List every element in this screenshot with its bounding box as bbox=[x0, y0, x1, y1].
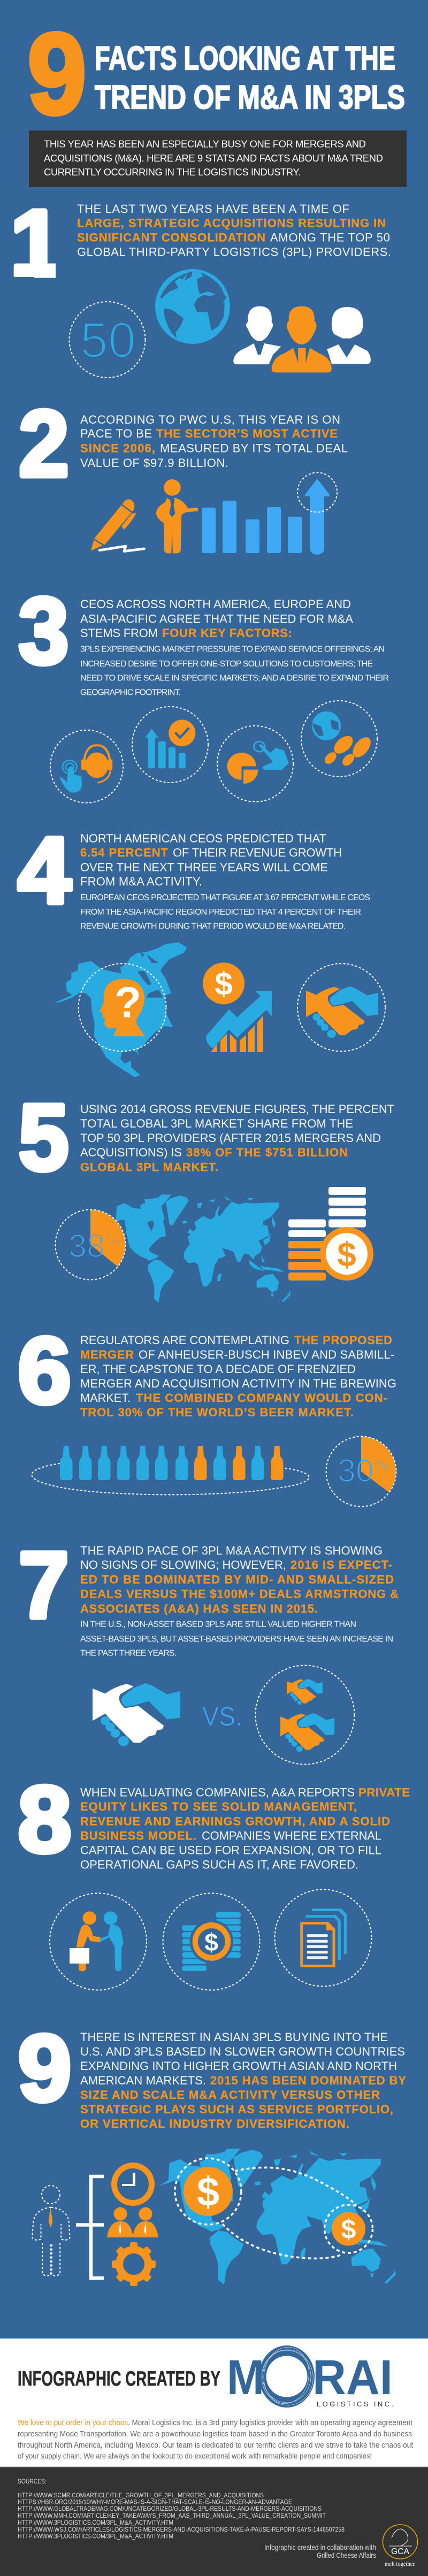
icon: business deal bbox=[50, 1893, 147, 1990]
fact 5 text: 38% OF THE $751 BILLION bbox=[186, 1146, 348, 1159]
icon: gear bbox=[112, 2242, 156, 2286]
icon: dollar coins bbox=[163, 1893, 260, 1990]
fact 7 text: NO SIGNS OF SLOWING; HOWEVER, bbox=[80, 1558, 286, 1571]
sources list: HTTPS://HBR.ORG/2015/10/WHY-MORE-MAS-IS-A-SIGN-THAT-SCALE-IS-NO-LONGER-AN-ADVANTAGE bbox=[18, 2498, 292, 2506]
logo: Morai Logistics: M bbox=[227, 2350, 264, 2405]
fact 4 text: FROM THE ASIA-PACIFIC REGION PREDICTED THAT 4 PERCENT OF THEIR bbox=[80, 908, 361, 917]
fact 5 text: GLOBAL 3PL MARKET. bbox=[80, 1161, 218, 1174]
panel: fact 7 bbox=[19, 1533, 399, 1764]
fact 5 text: TOP 50 3PL PROVIDERS (AFTER 2015 MERGERS AND bbox=[80, 1131, 381, 1145]
company description bbox=[18, 2418, 414, 2461]
fact 6 text: TROL 30% OF THE WORLD’S BEER MARKET. bbox=[80, 1406, 354, 1419]
fact 7 text: ED TO BE DOMINATED BY MID- AND SMALL-SIZED bbox=[80, 1573, 394, 1586]
chart: 38 percent pie: 38 bbox=[68, 1228, 105, 1264]
fact 9 text: SIZE AND SCALE M&A ACTIVITY VERSUS OTHER bbox=[80, 2088, 380, 2102]
collaboration credit: Infographic created in collaboration with bbox=[264, 2543, 376, 2551]
sources list: HTTP://WWW.3PLOGISTICS.COM/3PL_M&A_ACTIVITY.HTM bbox=[18, 2519, 173, 2526]
number 3: 3 bbox=[18, 579, 68, 684]
fact 6 text: OF ANHEUSER-BUSCH INBEV AND SABMILL- bbox=[139, 1348, 394, 1361]
fact 1 text: SIGNIFICANT CONSOLIDATION bbox=[77, 231, 265, 244]
fact 9 text: THERE IS INTEREST IN ASIAN 3PLS BUYING INTO THE bbox=[80, 2030, 388, 2044]
fact 3 text: GEOGRAPHIC FOOTPRINT. bbox=[80, 688, 181, 697]
fact 1 text: GLOBAL THIRD-PARTY LOGISTICS (3PL) PROVIDERS. bbox=[77, 245, 391, 259]
icon: world map with investments bbox=[159, 2149, 396, 2284]
icon: top 50 badge bbox=[70, 302, 146, 378]
icon: handshake bbox=[297, 964, 385, 1052]
fact 4 text bbox=[80, 832, 370, 931]
fact 3 text: CEOS ACROSS NORTH AMERICA, EUROPE AND bbox=[80, 597, 351, 611]
fact 8 text: OPERATIONAL GAPS SUCH AS IT, ARE FAVORED. bbox=[80, 1858, 358, 1871]
sources list: HTTP://WWW.3PLOGISTICS.COM/3PL_M&A_ACTIVITY.HTM bbox=[18, 2533, 173, 2540]
versus label: VS. bbox=[202, 1701, 242, 1731]
fact 9 text: OR VERTICAL INDUSTRY DIVERSIFICATION. bbox=[80, 2117, 349, 2130]
fact 7 text: ASSET-BASED 3PLS, BUT ASSET-BASED PROVIDERS HAVE SEEN AN INCREASE IN bbox=[80, 1635, 393, 1644]
fact 2 text bbox=[80, 413, 348, 470]
icon: world map bbox=[109, 1194, 291, 1302]
company description: We love to put order in your chaos bbox=[18, 2418, 128, 2427]
fact 7 text: ASSOCIATES (A&A) HAS SEEN IN 2015. bbox=[80, 1602, 318, 1615]
icon: two colleagues bbox=[107, 2207, 158, 2237]
fact 7 text: 2016 IS EXPECT- bbox=[291, 1558, 392, 1571]
sources list: HTTP://WWW.WSJ.COM/ARTICLES/LOGISTICS-MERGERS-AND-ACQUISITIONS-TAKE-A-PAUSE-REPORT-SAYS-1446507258 bbox=[18, 2526, 345, 2533]
fact 6 text bbox=[80, 1333, 396, 1419]
logo: Grilled Cheese Affairs: melt together. bbox=[385, 2560, 416, 2567]
icon: dollar growth bbox=[203, 963, 272, 1052]
fact 7 text: THE RAPID PACE OF 3PL M&A ACTIVITY IS SHOWING bbox=[80, 1544, 383, 1558]
fact 9 text: EXPANDING INTO HIGHER GROWTH ASIAN AND NORTH bbox=[80, 2059, 397, 2073]
icon: growth and check bbox=[132, 707, 208, 783]
company description: of your supply chain. We are always on the lookout to do exceptional work with remarkable people and companies! bbox=[18, 2452, 372, 2461]
fact 6 text: ER, THE CAPSTONE TO A DECADE OF FRENZIED bbox=[80, 1362, 356, 1376]
fact 3 text: 3PLS EXPERIENCING MARKET PRESSURE TO EXPAND SERVICE OFFERINGS; AN bbox=[80, 645, 385, 654]
icon: dollar growth: $ bbox=[215, 966, 233, 1002]
panel: fact 3 bbox=[18, 579, 389, 803]
fact 1 text: AMONG THE TOP 50 bbox=[270, 231, 390, 244]
panel: fact 6 bbox=[18, 1318, 396, 1506]
fact 7 text: IN THE U.S., NON-ASSET BASED 3PLS ARE STILL VALUED HIGHER THAN bbox=[80, 1620, 356, 1629]
fact 4 text: FROM M&A ACTIVITY. bbox=[80, 875, 202, 888]
fact 6 text: THE PROPOSED bbox=[294, 1333, 392, 1347]
fact 2 text: VALUE OF $97.9 BILLION. bbox=[80, 456, 228, 470]
icon: globe and footprints bbox=[301, 701, 377, 777]
fact 8 text: WHEN EVALUATING COMPANIES, A&A REPORTS bbox=[80, 1786, 355, 1799]
icon: large handshake bbox=[93, 1683, 180, 1746]
fact 8 text: REVENUE AND EARNINGS GROWTH, AND A SOLID bbox=[80, 1815, 390, 1828]
sources list: HTTP://WWW.GLOBALTRADEMAG.COM/UNCATEGORIZED/GLOBAL-3PL-RESULTS-AND-MERGERS-ACQUISITIONS bbox=[18, 2505, 322, 2512]
icon: coin stacks bbox=[288, 1187, 373, 1281]
fact 4 text: NORTH AMERICAN CEOS PREDICTED THAT bbox=[80, 832, 326, 845]
fact 8 text: COMPANIES WHERE EXTERNAL bbox=[202, 1829, 381, 1842]
fact 7 text bbox=[80, 1544, 399, 1658]
fact 1 text: LARGE, STRATEGIC ACQUISITIONS RESULTING IN bbox=[77, 216, 386, 230]
fact 5 text: USING 2014 GROSS REVENUE FIGURES, THE PERCENT bbox=[80, 1102, 394, 1116]
bar chart bbox=[202, 501, 302, 553]
icon: world map with investments: $ bbox=[197, 2169, 219, 2215]
icon: beer bottles bbox=[32, 1446, 309, 1494]
icon: clock bbox=[114, 2165, 152, 2203]
fact 8 text: CAPITAL CAN BE USED FOR EXPANSION, OR TO FILL bbox=[80, 1844, 381, 1857]
fact 4 text: EUROPEAN CEOS PROJECTED THAT FIGURE AT 3.67 PERCENT WHILE CEOS bbox=[80, 893, 370, 902]
panel: company footer bbox=[0, 2339, 428, 2467]
fact 6 text: MERGER AND ACQUISITION ACTIVITY IN THE BREWING bbox=[80, 1377, 396, 1390]
fact 6 text: THE COMBINED COMPANY WOULD CON- bbox=[136, 1391, 387, 1405]
logo: Grilled Cheese Affairs bbox=[383, 2525, 417, 2567]
fact 5 text: ACQUISITIONS) IS bbox=[80, 1146, 182, 1159]
icon: documents bbox=[275, 1889, 371, 1987]
number 2: 2 bbox=[19, 392, 69, 496]
number 7: 7 bbox=[19, 1533, 69, 1638]
fact 1 text bbox=[77, 202, 391, 259]
fact 1 text: THE LAST TWO YEARS HAVE BEEN A TIME OF bbox=[77, 202, 349, 216]
icon: pie chart and pointer bbox=[217, 726, 293, 802]
fact 2 text: PACE TO BE bbox=[80, 427, 152, 440]
panel: fact 1 bbox=[10, 191, 391, 378]
collaboration credit bbox=[264, 2543, 376, 2559]
panel: fact 5 bbox=[18, 1085, 394, 1302]
fact 3 text: FOUR KEY FACTORS: bbox=[162, 626, 292, 640]
credit heading: INFOGRAPHIC CREATED BY bbox=[18, 2367, 220, 2390]
panel: fact 8 bbox=[18, 1767, 410, 1990]
fact 4 text: 6.54 PERCENT bbox=[80, 846, 169, 860]
logo: Morai Logistics: RAI bbox=[312, 2350, 393, 2405]
icon: world map with investments: $ bbox=[341, 2214, 356, 2244]
chart: 30 percent pie bbox=[326, 1437, 396, 1506]
icon: businessman bbox=[156, 479, 198, 553]
fact 8 text bbox=[80, 1786, 410, 1871]
fact 2 text: MEASURED BY ITS TOTAL DEAL bbox=[160, 442, 348, 455]
fact 4 text: REVENUE GROWTH DURING THAT PERIOD WOULD BE M&A RELATED. bbox=[80, 922, 346, 931]
fact 3 text: STEMS FROM bbox=[80, 626, 158, 640]
icon: customer service bbox=[50, 730, 123, 803]
icon: north america map with head bbox=[43, 942, 187, 1077]
fact 8 text: BUSINESS MODEL. bbox=[80, 1829, 196, 1842]
icon: coin stacks: $ bbox=[337, 1235, 356, 1274]
fact 9 text bbox=[80, 2030, 406, 2130]
number 9: 9 bbox=[18, 2016, 72, 2121]
panel: intro: THIS YEAR HAS BEEN AN ESPECIALLY BUSY ONE FOR MERGERS AND bbox=[44, 138, 366, 150]
icon: two small handshakes bbox=[256, 1666, 354, 1764]
icon: globe bbox=[155, 269, 230, 344]
fact 3 text: INCREASED DESIRE TO OFFER ONE-STOP SOLUTIONS TO CUSTOMERS; THE bbox=[80, 660, 373, 669]
number 1: 1 bbox=[10, 191, 63, 296]
fact 3 text: NEED TO DRIVE SCALE IN SPECIFIC MARKETS; AND A DESIRE TO EXPAND THEIR bbox=[80, 674, 389, 683]
icon: pen signing bbox=[91, 500, 144, 551]
fact 6 text: MERGER bbox=[80, 1348, 134, 1361]
chart: 30 percent pie: 30 bbox=[338, 1453, 374, 1489]
fact 9 text: STRATEGIC PLAYS SUCH AS SERVICE PORTFOLIO, bbox=[80, 2103, 393, 2116]
fact 2 text: ACCORDING TO PWC U.S, THIS YEAR IS ON bbox=[80, 413, 340, 426]
logo: Grilled Cheese Affairs: GCA bbox=[391, 2547, 409, 2556]
arrow: rising bbox=[297, 473, 337, 555]
fact 5 text bbox=[80, 1102, 394, 1174]
sources list bbox=[18, 2478, 345, 2540]
panel: fact 9 bbox=[18, 2016, 406, 2286]
fact 7 text: DEALS VERSUS THE $100M+ DEALS ARMSTRONG & bbox=[80, 1588, 399, 1600]
collaboration credit: Grilled Cheese Affairs bbox=[317, 2551, 376, 2559]
fact 7 text: THE PAST THREE YEARS. bbox=[80, 1649, 177, 1658]
logo: Morai Logistics: LOGISTICS INC. bbox=[317, 2400, 393, 2408]
icon: top 50 badge: 50 bbox=[80, 312, 136, 368]
fact 9 text: U.S. AND 3PLS BASED IN SLOWER GROWTH COUNTRIES bbox=[80, 2045, 405, 2058]
logo: Morai Logistics bbox=[227, 2344, 393, 2408]
fact 4 text: OVER THE NEXT THREE YEARS WILL COME bbox=[80, 861, 328, 874]
panel: fact 4 bbox=[18, 818, 385, 1077]
sources list: HTTP://WWW.SCMR.COM/ARTICLE/THE_GROWTH_OF_3PL_MERGERS_AND_ACQUISITIONS bbox=[18, 2491, 264, 2499]
fact 8 text: PRIVATE bbox=[358, 1786, 410, 1799]
fact 8 text: EQUITY LIKES TO SEE SOLID MANAGEMENT, bbox=[80, 1800, 357, 1813]
icon: dashed person bbox=[32, 2186, 70, 2275]
panel: intro bbox=[29, 131, 407, 187]
bracket bbox=[76, 2176, 104, 2278]
number 6: 6 bbox=[18, 1318, 71, 1423]
title bbox=[28, 9, 405, 138]
fact 9 text: 2015 HAS BEEN DOMINATED BY bbox=[210, 2074, 406, 2087]
fact 4 text: OF THEIR REVENUE GROWTH bbox=[173, 846, 342, 860]
number 8: 8 bbox=[18, 1767, 72, 1872]
sources list: HTTP://WWW.MMH.COM/ARTICLE/KEY_TAKEAWAYS_FROM_AAS_THIRD_ANNUAL_3PL_VALUE_CREATION_SUMMIT bbox=[18, 2512, 326, 2519]
chart: 30 percent pie: % bbox=[376, 1457, 389, 1474]
chart: 38 percent pie bbox=[56, 1210, 125, 1279]
fact 9 text: AMERICAN MARKETS. bbox=[80, 2074, 206, 2087]
chart: 38 percent pie: % bbox=[106, 1232, 120, 1249]
fact 6 text: MARKET. bbox=[80, 1391, 131, 1405]
icon: north america map with head: ? bbox=[114, 978, 141, 1027]
fact 2 text: THE SECTOR’S MOST ACTIVE bbox=[156, 427, 338, 440]
sources list: SOURCES: bbox=[18, 2478, 47, 2485]
panel: intro: CURRENTLY OCCURRING IN THE LOGISTICS INDUSTRY. bbox=[44, 166, 301, 178]
icon: three executives bbox=[233, 306, 371, 372]
number 5: 5 bbox=[18, 1085, 68, 1190]
panel: fact 2 bbox=[19, 392, 348, 555]
fact 3 text: ASIA-PACIFIC AGREE THAT THE NEED FOR M&A bbox=[80, 612, 353, 626]
fact 2 text: SINCE 2006, bbox=[80, 442, 155, 455]
panel: sources footer bbox=[0, 2466, 428, 2576]
icon: dollar coins: $ bbox=[204, 1928, 218, 1956]
big number nine: 9 bbox=[28, 9, 87, 138]
fact 5 text: TOTAL GLOBAL 3PL MARKET SHARE FROM THE bbox=[80, 1117, 353, 1130]
fact 3 text bbox=[80, 597, 389, 697]
panel: intro: ACQUISITIONS (M&A). HERE ARE 9 STATS AND FACTS ABOUT M&A TREND bbox=[44, 152, 383, 164]
heading text bbox=[95, 40, 405, 116]
fact 6 text: REGULATORS ARE CONTEMPLATING bbox=[80, 1333, 289, 1347]
number 4: 4 bbox=[18, 818, 71, 923]
